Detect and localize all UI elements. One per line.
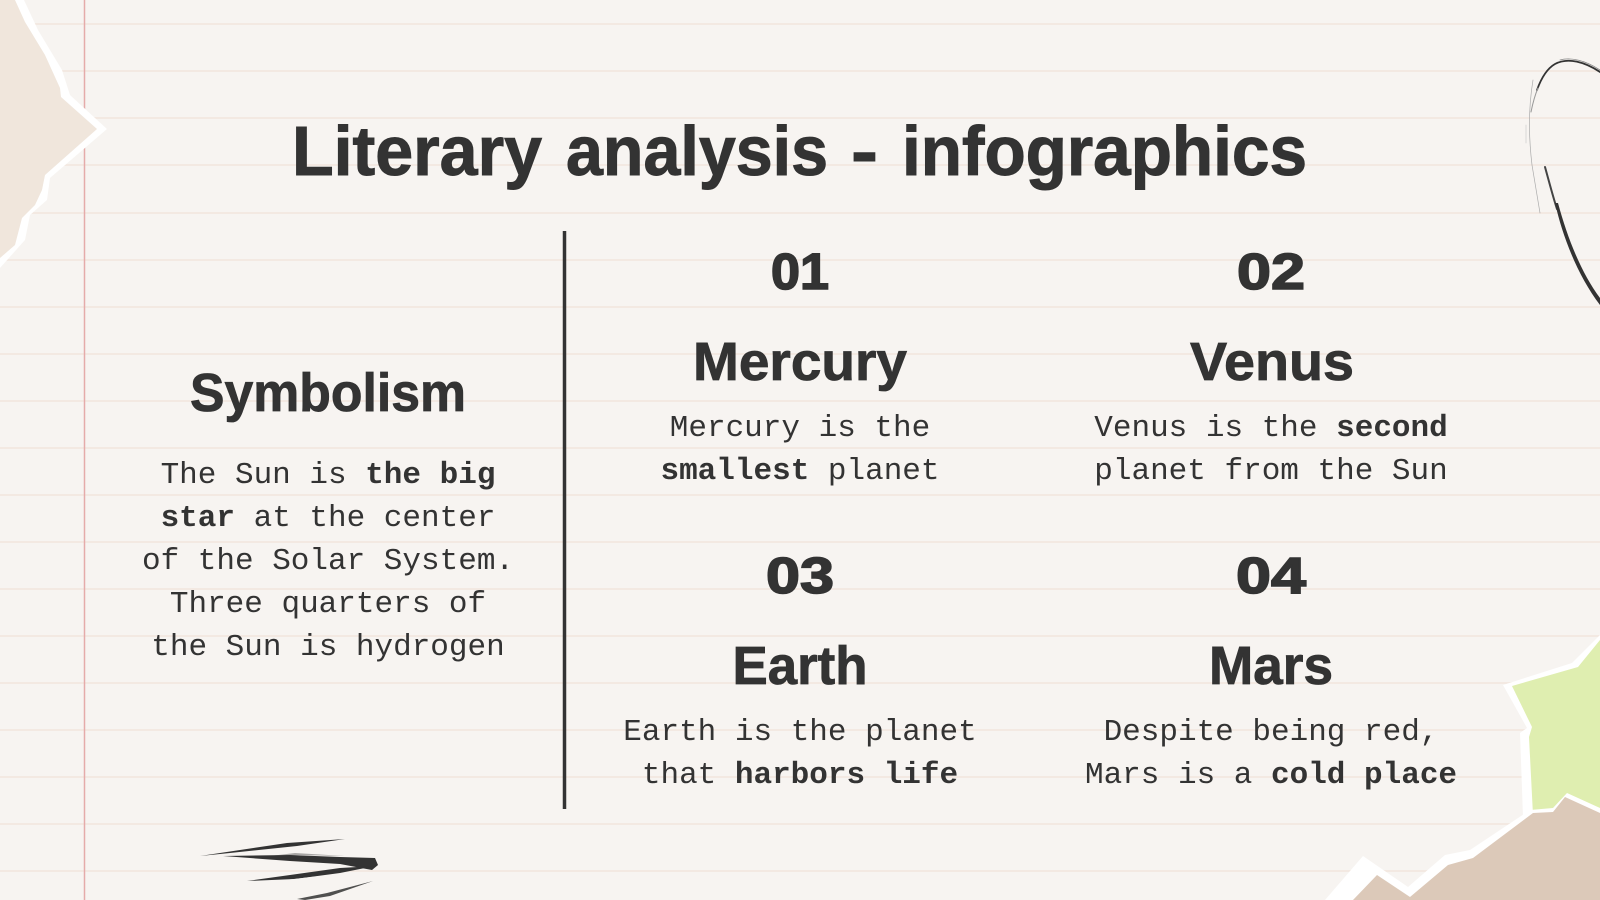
title: infographics [902, 112, 1307, 190]
heading: Venus: Venus [1190, 332, 1354, 392]
text: symbolism description: star at the center [161, 501, 495, 536]
text: Mars description: Mars is a cold place [1085, 758, 1457, 793]
title: Literary [292, 112, 542, 190]
doodle: scribble bottom left [200, 839, 378, 900]
heading: Earth: Earth [732, 636, 868, 696]
heading: Mercury: Mercury [693, 332, 907, 392]
text: Mars description: Despite being red, [1104, 715, 1438, 750]
heading: Mars: Mars [1209, 636, 1333, 696]
text: Mercury description [660, 411, 940, 489]
text: Earth description [623, 715, 977, 793]
text: Mercury description: smallest planet [660, 454, 940, 489]
text: Venus description [1094, 411, 1448, 489]
number 01: 01 [771, 243, 829, 300]
divider line [563, 231, 566, 809]
torn paper: bottom right tan [1325, 793, 1600, 900]
text: symbolism description [142, 458, 514, 665]
title: analysis [566, 112, 828, 190]
text: Earth description: that harbors life [642, 758, 958, 793]
torn paper: bottom right green [1503, 635, 1600, 820]
number 02: 02 [1237, 243, 1305, 300]
text: Mercury description: Mercury is the [670, 411, 930, 446]
text: symbolism description: of the Solar System. [142, 544, 514, 579]
text: Earth description: Earth is the planet [623, 715, 977, 750]
number 03: 03 [766, 547, 834, 604]
doodle: curved pen stroke top right [1526, 59, 1600, 305]
panel: 01 Mercury [660, 243, 940, 489]
text: Mars description [1085, 715, 1457, 793]
text: symbolism description: Three quarters of [170, 587, 486, 622]
title: - [851, 112, 878, 190]
panel: 03 Earth [623, 547, 977, 793]
heading: Symbolism: Symbolism [190, 363, 466, 423]
panel: 02 Venus [1094, 243, 1448, 489]
text: symbolism description: The Sun is the big [161, 458, 495, 493]
torn paper: top left [0, 0, 107, 268]
title [292, 112, 1307, 190]
panel: symbolism [142, 363, 514, 665]
panel: 04 Mars [1085, 547, 1457, 793]
text: Venus description: planet from the Sun [1094, 454, 1448, 489]
text: Venus description: Venus is the second [1094, 411, 1448, 446]
text: symbolism description: the Sun is hydrogen [151, 630, 505, 665]
number 04: 04 [1236, 547, 1307, 604]
